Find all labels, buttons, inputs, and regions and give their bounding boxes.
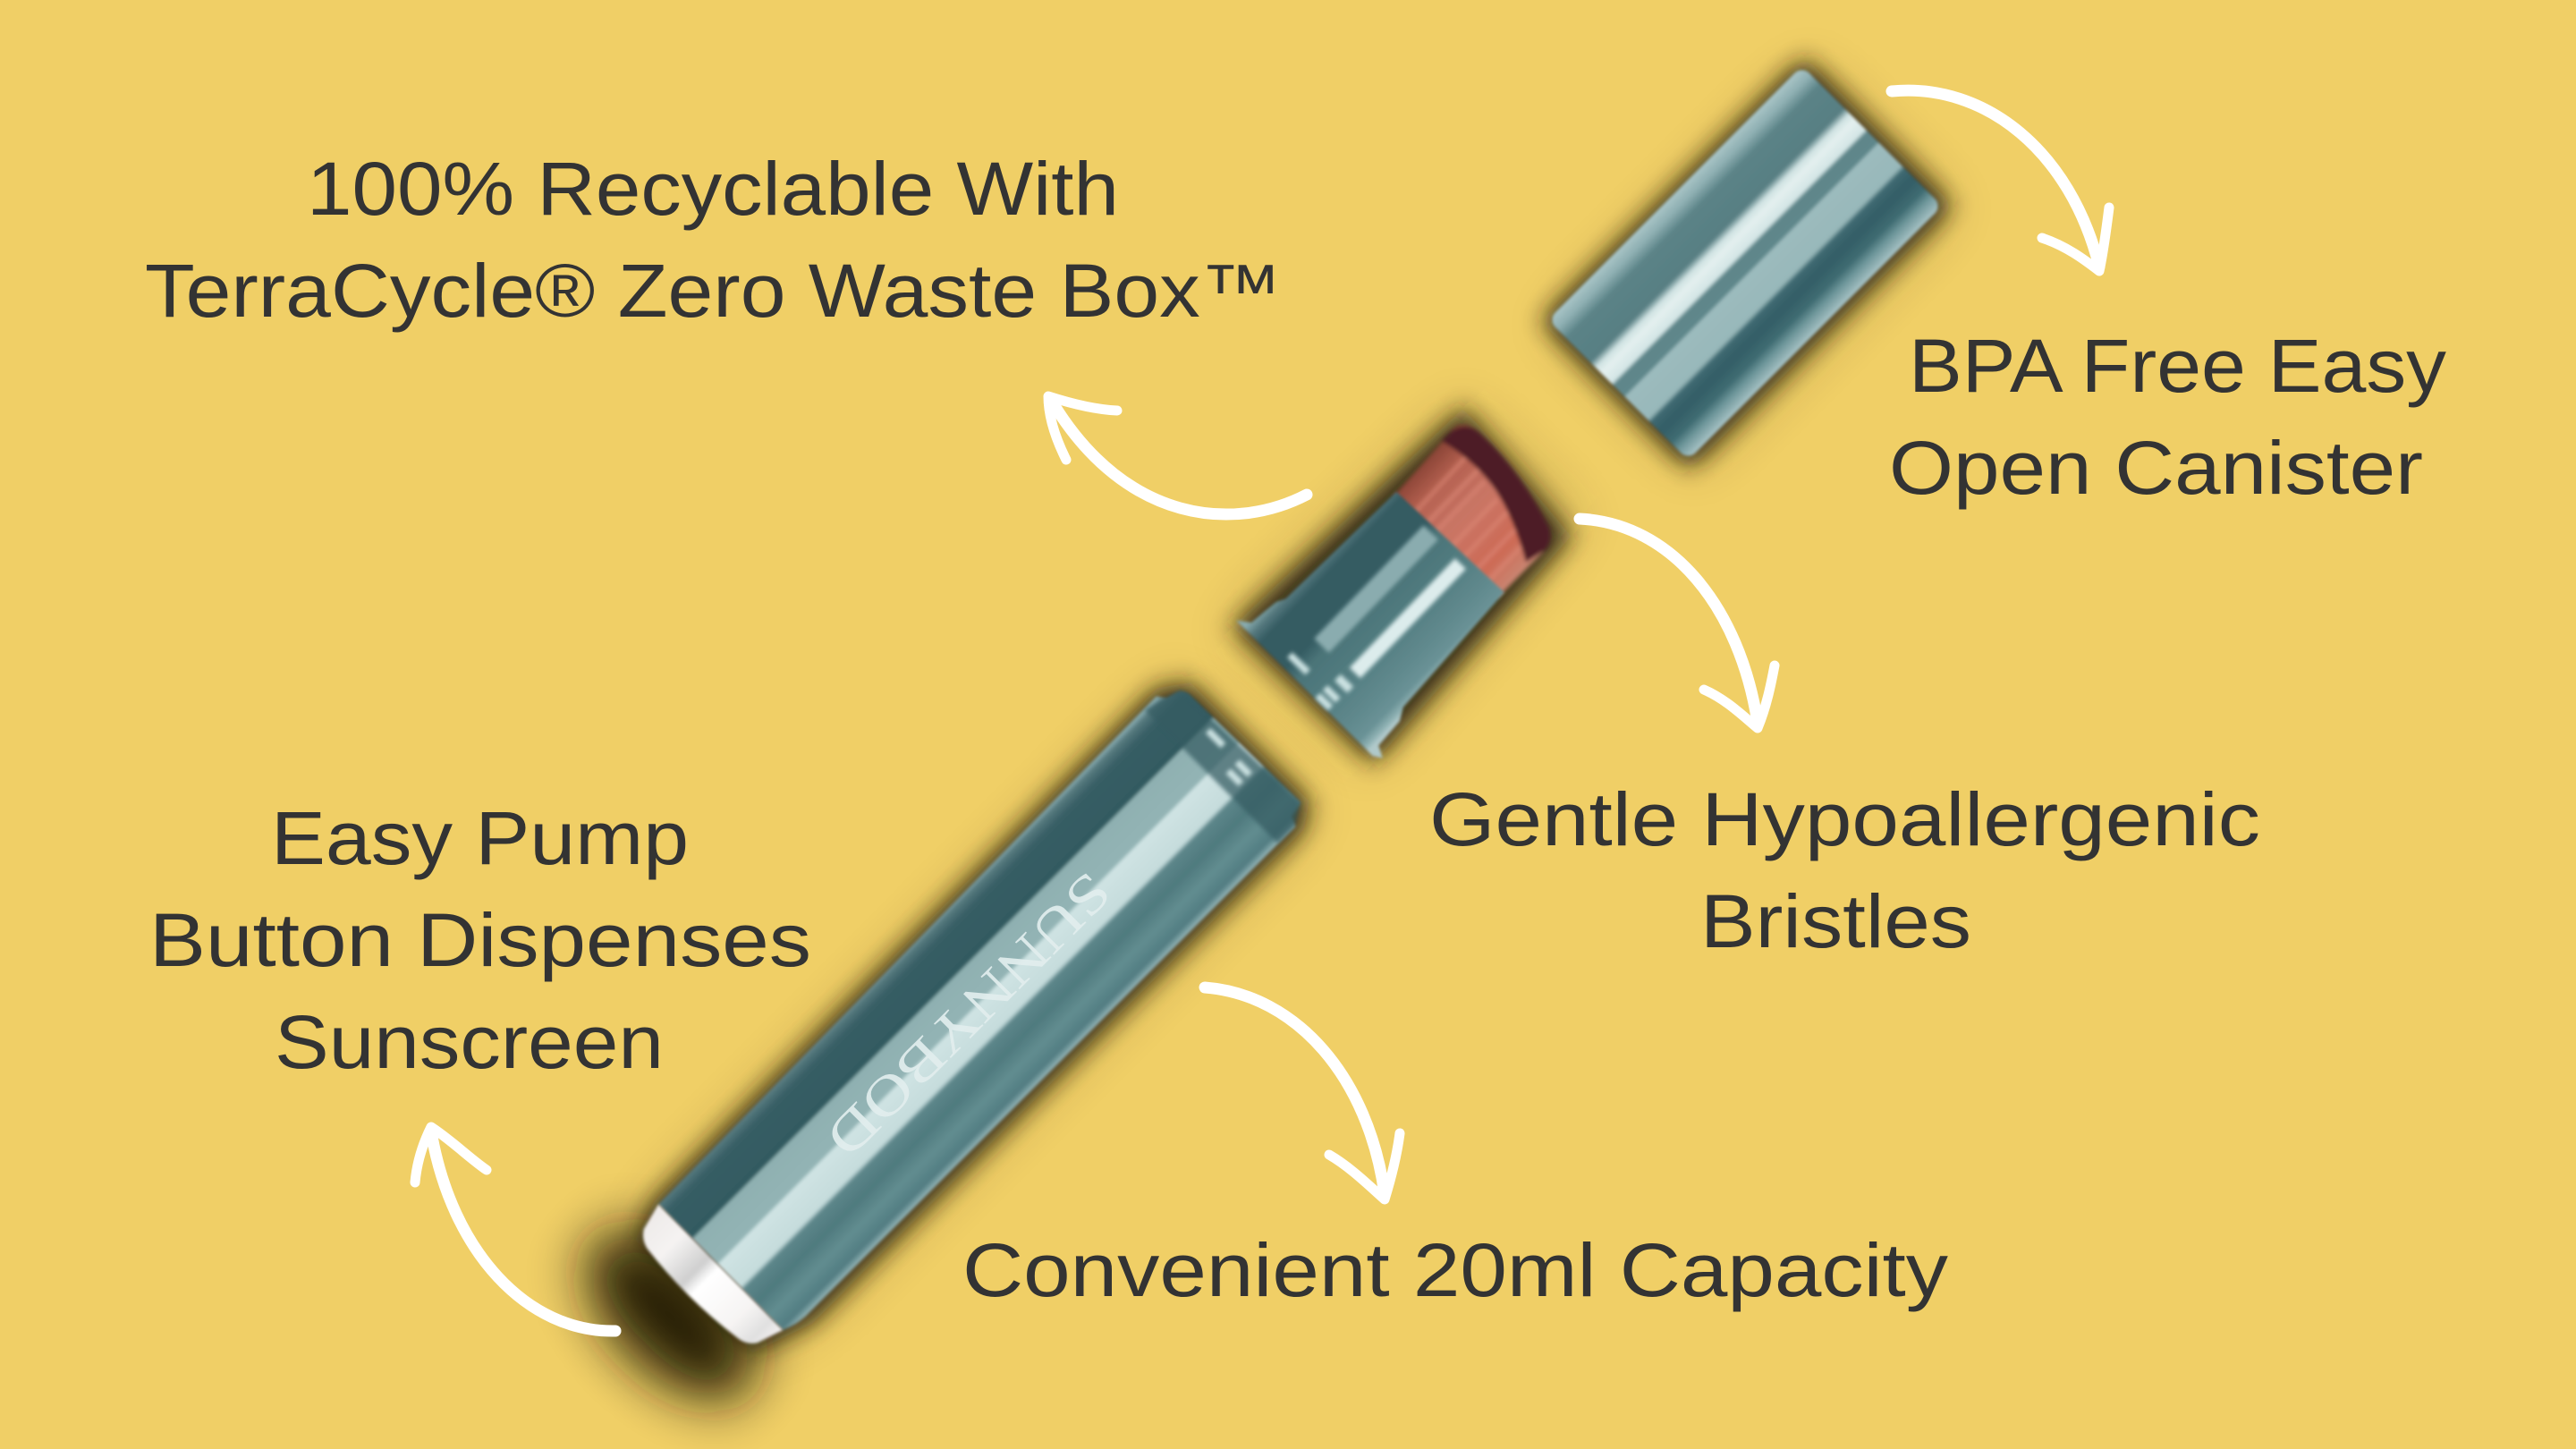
arrow: pump (415, 1127, 615, 1331)
bottle neck (1145, 679, 1309, 843)
arrow: capacity (1205, 987, 1400, 1199)
arrow: bristles (1580, 519, 1775, 728)
main bottle (556, 665, 1322, 1430)
label: recyclable: TerraCycle® Zero Waste Box™ (145, 249, 1282, 333)
brush white strip (1350, 558, 1466, 678)
bristles (1391, 418, 1572, 598)
white pump button (628, 1204, 784, 1360)
canister cap (1540, 56, 1953, 470)
arrow: recyclable (1048, 396, 1307, 514)
arrow: canister (1892, 90, 2109, 271)
label: pump: Button Dispenses (149, 898, 811, 982)
groove highlights (1281, 640, 1353, 712)
label: canister: Open Canister (1889, 426, 2423, 510)
label: recyclable (145, 147, 1282, 333)
label: pump: Sunscreen (275, 1000, 664, 1084)
bottle body (653, 677, 1309, 1335)
label: bristles: Gentle Hypoallergenic (1429, 777, 2260, 861)
brush head (1231, 396, 1597, 766)
brush body (1234, 471, 1524, 762)
label: capacity: Convenient 20ml Capacity (962, 1228, 1948, 1312)
bottle end shadow (556, 1202, 784, 1430)
label: canister: BPA Free Easy (1909, 324, 2446, 408)
label: bristles: Bristles (1700, 879, 1971, 963)
bottle brand text: SUNNYBOD (814, 860, 1123, 1168)
label: bristles (1429, 777, 2260, 963)
label: canister (1889, 324, 2446, 510)
label: recyclable: 100% Recyclable With (307, 147, 1119, 231)
label: pump: Easy Pump (271, 796, 689, 880)
brush light strip (1314, 525, 1438, 653)
label: pump (149, 796, 811, 1084)
groove highlights (1195, 728, 1253, 786)
